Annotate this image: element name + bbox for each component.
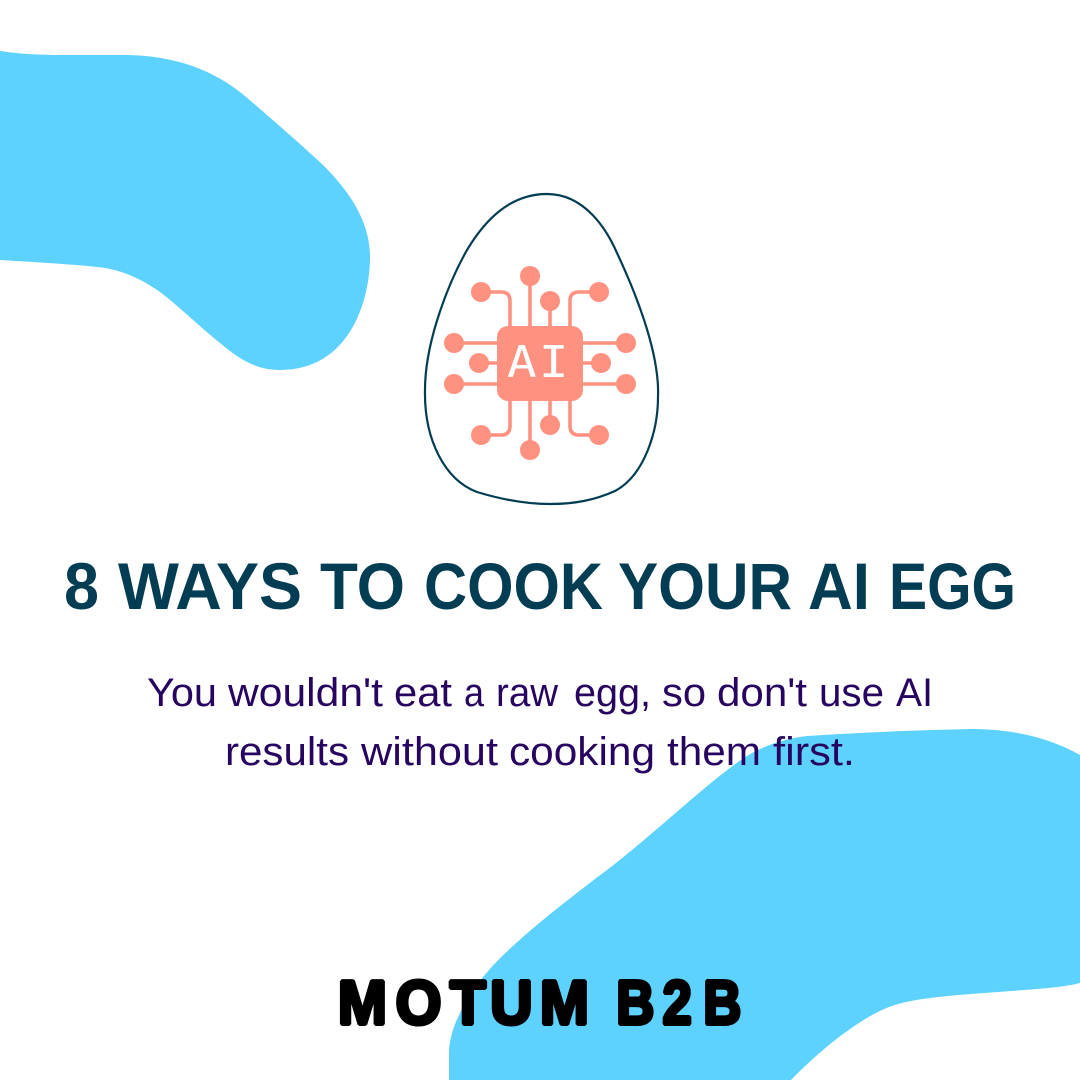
brand wordmark	[338, 968, 741, 1038]
subtitle: don't	[717, 671, 807, 715]
brand wordmark: B2B	[616, 969, 741, 1038]
subtitle: use	[819, 671, 884, 715]
chip label: AI	[507, 337, 569, 388]
subtitle: cooking	[509, 730, 655, 774]
subtitle: so	[662, 671, 706, 715]
brand wordmark: MOTUM	[338, 968, 589, 1037]
subtitle: egg,	[574, 671, 651, 715]
blob: bottom-right	[449, 729, 1080, 1080]
subtitle: them	[667, 730, 761, 774]
subtitle: AI	[896, 671, 933, 715]
title: 8	[64, 549, 99, 623]
subtitle: results	[225, 730, 349, 774]
blob: top-left	[0, 51, 370, 370]
title: EGG	[889, 549, 1016, 623]
title	[64, 549, 1016, 623]
title: AI	[808, 549, 870, 623]
subtitle: wouldn't	[227, 671, 383, 715]
title: WAYS	[118, 549, 302, 623]
subtitle: raw	[496, 671, 558, 715]
subtitle: eat	[394, 671, 452, 715]
icon: AI chip	[444, 266, 636, 460]
egg outline	[425, 194, 658, 504]
title: COOK	[424, 549, 603, 623]
title: TO	[320, 549, 405, 623]
subtitle: You	[147, 671, 217, 715]
chip traces	[454, 276, 626, 450]
chip nodes	[444, 266, 636, 460]
subtitle: without	[360, 730, 498, 774]
title: YOUR	[618, 549, 792, 623]
subtitle: a	[464, 671, 485, 715]
subtitle: first.	[773, 730, 855, 774]
chip body	[497, 326, 583, 401]
subtitle	[147, 671, 933, 774]
